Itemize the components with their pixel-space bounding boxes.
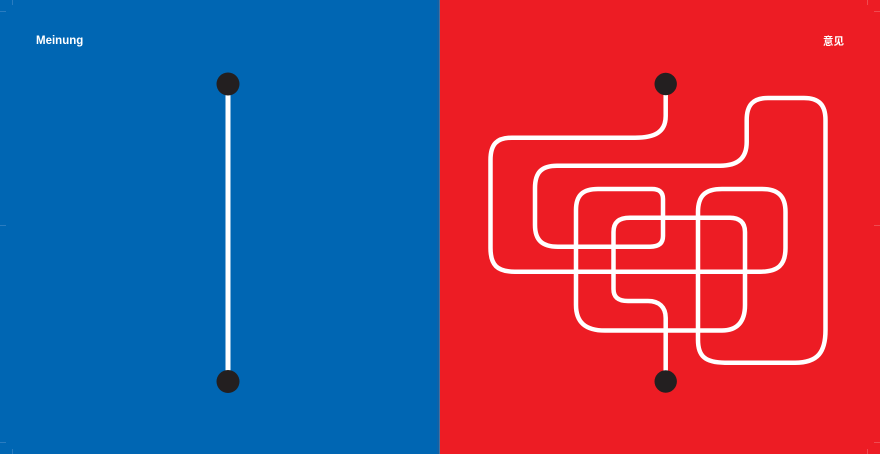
heading: Meinung: Meinung xyxy=(36,35,83,47)
top node xyxy=(216,72,240,96)
heading: 意见: 意见 xyxy=(823,34,844,48)
straight line xyxy=(226,84,230,381)
top node xyxy=(654,73,677,95)
bottom node xyxy=(654,370,677,393)
bottom node xyxy=(216,370,240,393)
panel: Meinung (blue) xyxy=(0,0,440,454)
tangled line xyxy=(490,84,826,381)
panel: 意见 (red) xyxy=(440,0,880,454)
